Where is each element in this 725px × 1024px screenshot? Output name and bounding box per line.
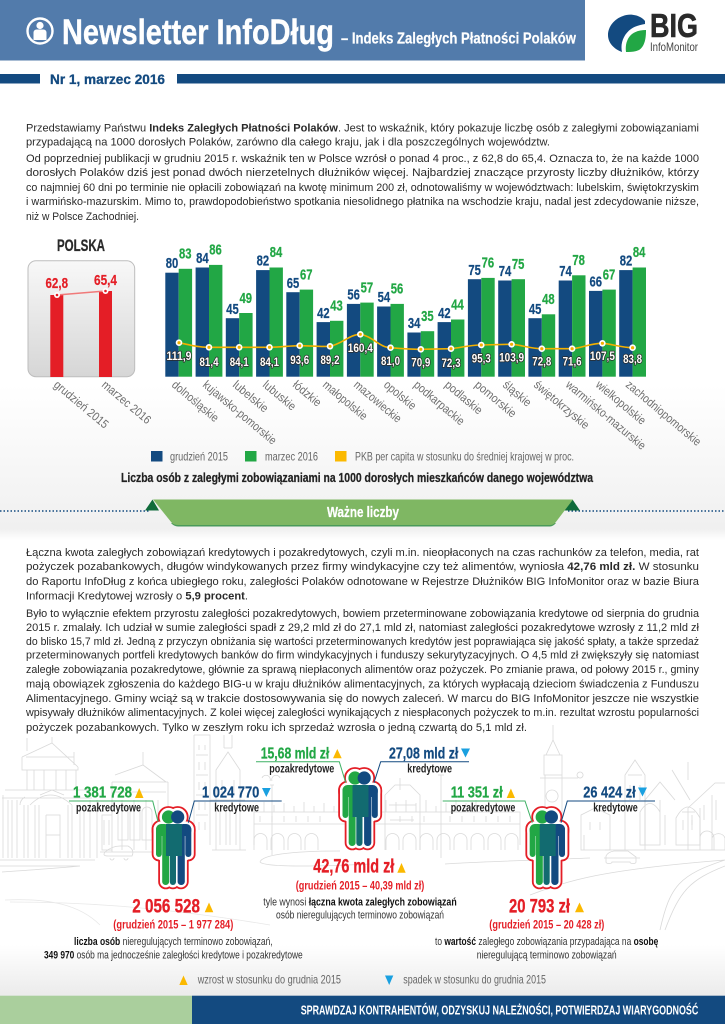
callout: persons 2 056 528: (grudzień 2015 – 1 977 284) — [113, 917, 233, 931]
callout: average 20 793 zł: 20 793 zł — [509, 895, 570, 917]
chart caption: Liczba osób z zaległymi zobowiązaniami na 1000 dorosłych mieszkańców danego województwa — [121, 470, 594, 485]
callout: total amount 42,76 mld zł: (grudzień 2015 – 40,39 mld zł) — [296, 880, 424, 892]
green bars — [179, 265, 646, 377]
values: 65,4 — [94, 272, 118, 289]
stat: average non-credit 11 351 zł: pozakredytowe — [451, 803, 515, 815]
intro text: niż w Polsce Zachodniej. — [26, 211, 139, 223]
main article text: mają obowiązek zgłoszenia do każdego BIG-u w kraju dłużników alimentacyjnych, za których wypłacają dzieciom świadczenia z Funduszu — [26, 678, 699, 690]
callout: persons 2 056 528 — [44, 895, 303, 962]
title: Newsletter InfoDług — [62, 13, 334, 52]
callout: average 20 793 zł — [435, 895, 658, 962]
trend line with markers — [54, 288, 108, 298]
logo: BIG InfoMonitor — [608, 7, 698, 54]
GDP value labels — [166, 343, 643, 370]
callout: total amount 42,76 mld zł: tyle wynosi łączna kwota zaległych zobowiązań — [263, 897, 457, 909]
navy value labels: 74 — [499, 263, 512, 280]
panel box — [28, 261, 135, 377]
green value labels: 76 — [482, 254, 494, 272]
GDP value labels: 93,6 — [290, 355, 309, 367]
axis labels: grudzień 2015 — [51, 378, 112, 432]
navy value labels: 56 — [347, 286, 360, 304]
GDP value labels: 95,3 — [472, 354, 491, 366]
green value labels: 84 — [270, 244, 283, 261]
main article text: do Raportu InfoDług z końca ubiegłego roku, zaległości Polaków odnotowane w Rejestrze Dłużników BIG InfoMonitor oraz w bazie Biura — [26, 576, 699, 588]
main article text: do blisko 15,7 mld zł. Jedną z przyczyn obniżania się wartości przeterminowanych kredytów jest poprawiająca się jakość spłaty, a także sprzedaż — [26, 636, 699, 648]
chart legend — [151, 450, 574, 464]
stat: persons credit 1 024 770: 1 024 770 — [202, 785, 259, 802]
voivodeship axis labels: lubelskie — [230, 378, 271, 415]
callout: total amount 42,76 mld zł: 42,76 mld zł — [313, 856, 395, 878]
icon: centre people group — [342, 771, 378, 846]
intro text: Przedstawiamy Państwu Indeks Zaległych Płatności Polaków . Jest to wskaźnik, który pokazuje liczbę osób z zaległymi zobowiązaniami — [26, 122, 699, 134]
intro text — [26, 122, 700, 223]
GDP value labels: 71,6 — [563, 356, 582, 368]
GDP value labels: 84,1 — [260, 357, 280, 369]
stat: amount credit 27,08 mld zł: 27,08 mld zł — [389, 745, 459, 762]
icon: left people group — [156, 810, 191, 885]
logo: BIG InfoMonitor: InfoMonitor — [650, 40, 698, 54]
voivodeship axis labels: warmińsko-mazurskie — [562, 377, 649, 453]
main article text: przeterminowanych portfeli kredytowych banków do firm windykacyjnych i funduszy sekurytyzacyjnych. O 4,5 mld zł zwiększyły się natomiast — [26, 650, 699, 662]
voivodeship axis labels — [169, 377, 704, 453]
voivodeship axis labels: opolskie — [381, 378, 419, 413]
chart legend: grudzień 2015 — [170, 450, 228, 464]
voivodeship axis labels: zachodniopomorskie — [623, 378, 704, 449]
stat: average non-credit 11 351 zł — [443, 785, 532, 823]
main article text: 2015 r. zmalały. Ich udział w sumie zaległości spadł z 29,2 mld zł do 27,1 mld zł, natomiast zaległości pozakredytowe wzrosły z 11,2 mld zł — [26, 622, 700, 634]
GDP value labels: 84,1 — [230, 357, 249, 369]
intro text: dorosłych Polaków dziś jest ponad dwóch nierzetelnych dłużników więcej. Najbardziej znaczące przyrosty liczby dłużników, którzy — [26, 167, 700, 179]
issue strip: Nr 1, marzec 2016 — [50, 71, 165, 87]
GDP value labels: 72,3 — [442, 358, 460, 370]
red bars — [50, 291, 112, 377]
navy value labels: 42 — [317, 305, 330, 322]
GDP value labels: 111,9 — [166, 351, 192, 363]
green value labels: 49 — [240, 290, 252, 307]
GDP value labels: 89,2 — [320, 355, 340, 367]
navy value labels: 84 — [196, 250, 209, 267]
callout: total amount 42,76 mld zł — [263, 856, 457, 921]
main article text: Alimentacyjnego. Gminy wciąż są w trakcie dostosowywania się do nowych zaleceń. W marcu do BIG InfoMonitor jeszcze nie wszystkie — [26, 693, 699, 705]
intro text: co najmniej 60 dni po terminie nie opłacili zobowiązań na kwotę minimum 200 zł, odnotowaliśmy w województwach: lubelskim, świętokrzyskim — [26, 182, 699, 194]
navy bars — [165, 268, 633, 377]
main article text: Było to wyłącznie efektem przyrostu zaległości pozakredytowych, bowiem przeterminowane zobowiązania kredytowe od sierpnia do grudnia — [26, 608, 699, 620]
GDP value labels: 70,9 — [411, 358, 430, 370]
stat: amount non-credit 15,68 mld zł: pozakredytowe — [269, 763, 334, 775]
axis labels: marzec 2016 — [99, 378, 154, 427]
green value labels: 84 — [633, 244, 646, 261]
axis labels — [51, 378, 154, 432]
icon: person in circle — [28, 18, 52, 44]
stat: amount non-credit 15,68 mld zł — [256, 745, 346, 783]
stat: amount credit 27,08 mld zł — [374, 745, 470, 783]
stat: persons non-credit 1 381 728 — [69, 785, 158, 822]
GDP value labels: 107,5 — [590, 351, 615, 363]
chart legend: PKB per capita w stosunku do średniej krajowej w proc. — [355, 450, 574, 464]
trend legend: spadek w stosunku do grudnia 2015 — [403, 972, 546, 986]
main article text: wpisywały dłużników alimentacyjnych. Z kolei więcej zaległości wynikających z niespłaconych pożyczek to m.in. rezultat wzrostu popularności — [25, 707, 699, 719]
stat: average credit 26 424 zł: 26 424 zł — [583, 785, 636, 802]
callout: total amount 42,76 mld zł: osób nieregulujących terminowo zobowiązań — [276, 909, 444, 921]
navy value labels: 65 — [287, 275, 299, 292]
GDP value labels: 81,0 — [381, 356, 400, 368]
stat: average non-credit 11 351 zł: 11 351 zł — [451, 785, 503, 802]
navy value labels: 74 — [559, 263, 572, 280]
green value labels: 67 — [300, 266, 312, 284]
voivodeship axis labels: wielkopolskie — [592, 377, 649, 428]
background fades — [0, 385, 725, 996]
voivodeship axis labels: lubuskie — [260, 378, 299, 414]
main article text: Informacji Kredytowej wzrosły o 5,9 procent. — [26, 590, 248, 602]
city sketch background — [0, 725, 725, 930]
voivodeship axis labels: śląskie — [500, 378, 535, 410]
main article text — [25, 547, 700, 734]
green value labels: 83 — [179, 246, 192, 262]
subtitle: – Indeks Zaległych Płatności Polaków — [341, 30, 577, 48]
stat: persons non-credit 1 381 728: 1 381 728 — [73, 785, 132, 802]
values — [46, 272, 118, 292]
navy value labels: 82 — [620, 252, 632, 270]
footer bar — [0, 996, 725, 1024]
GDP value labels: 83,8 — [623, 354, 643, 366]
voivodeship axis labels: podkarpackie — [411, 378, 468, 428]
green value labels: 35 — [421, 308, 434, 325]
stat: persons non-credit 1 381 728: pozakredytowe — [76, 803, 141, 815]
panel: Polska chart — [28, 237, 154, 432]
callout: average 20 793 zł: nieregulującą terminowo zobowiązań — [477, 950, 617, 962]
stat: amount credit 27,08 mld zł: kredytowe — [407, 763, 452, 775]
stat: persons credit 1 024 770 — [188, 785, 282, 823]
intro text: Od poprzedniej publikacji w grudniu 2015 r. wskaźnik ten w Polsce wzrósł o ponad 4 proc., z 62,8 do 65,4. Oznacza to, że na każde 1000 — [26, 153, 699, 165]
trend legend: wzrost w stosunku do grudnia 2015 — [197, 972, 341, 986]
navy value labels — [166, 250, 632, 332]
stat: average credit 26 424 zł — [561, 785, 655, 823]
bar chart: voivodeships — [165, 242, 704, 453]
chart legend: marzec 2016 — [265, 450, 318, 464]
green value labels: 56 — [391, 280, 403, 298]
header band — [0, 0, 585, 61]
green value labels: 44 — [451, 296, 464, 314]
green value labels: 43 — [330, 298, 343, 314]
navy value labels: 54 — [378, 289, 391, 306]
values: 62,8 — [46, 275, 68, 292]
navy value labels: 45 — [226, 301, 239, 318]
navy value labels: 80 — [166, 255, 178, 272]
callout: average 20 793 zł: to wartość zaległego zobowiązania przypadająca na osobę — [435, 936, 658, 948]
navy value labels: 82 — [257, 252, 269, 270]
GDP value labels: 160,4 — [348, 343, 373, 355]
GDP line with markers — [176, 331, 636, 353]
stat: persons credit 1 024 770: kredytowe — [214, 803, 259, 815]
GDP value labels: 72,8 — [532, 356, 552, 368]
logo: BIG InfoMonitor: BIG — [650, 7, 698, 44]
voivodeship axis labels: małopolskie — [320, 378, 371, 423]
callout: average 20 793 zł: (grudzień 2015 – 20 428 zł) — [489, 917, 604, 931]
heading: Polska: POLSKA — [57, 237, 105, 255]
GDP value labels: 103,9 — [499, 352, 524, 364]
green value labels: 86 — [209, 242, 222, 258]
voivodeship axis labels: łódzkie — [290, 378, 325, 410]
voivodeship axis labels: dolnośląskie — [169, 378, 222, 425]
trend legend — [179, 972, 546, 986]
main article text: pożyczek pozabankowych, długów windykowanych przez firmy windykacyjne czy też alimentów, wyniosła 42,76 mld zł. W stosunku — [26, 561, 699, 573]
icon: right people group — [530, 810, 565, 885]
voivodeship axis labels: kujawsko-pomorskie — [200, 378, 280, 448]
navy value labels: 66 — [590, 274, 602, 290]
voivodeship axis labels: świętokrzyskie — [531, 378, 592, 432]
callout: persons 2 056 528: 2 056 528 — [132, 895, 200, 917]
stat: average credit 26 424 zł: kredytowe — [593, 803, 638, 815]
section banner: Ważne liczby — [0, 500, 725, 526]
stat: amount non-credit 15,68 mld zł: 15,68 mld zł — [261, 745, 330, 762]
green value labels: 57 — [361, 280, 373, 296]
main article text: Łączna kwota zaległych zobowiązań kredytowych i pozakredytowych, czyli m.in. nieopłaconych na czas rachunków za telefon, media, rat — [26, 547, 699, 559]
callout: persons 2 056 528: liczba osób nieregulujących terminowo zobowiązań, — [74, 936, 273, 948]
voivodeship axis labels: mazowieckie — [351, 378, 405, 426]
green value labels: 67 — [603, 266, 615, 284]
navy value labels: 45 — [529, 301, 541, 318]
navy value labels: 34 — [408, 315, 421, 332]
green value labels: 48 — [542, 291, 555, 308]
main article text: pożyczek pozabankowych. Tylko w zeszłym roku ich sprzedaż wzrosła o jedną czwartą do 5,1 mld zł. — [26, 722, 527, 734]
issue strip — [0, 71, 725, 87]
GDP value labels: 81,4 — [200, 357, 219, 369]
navy value labels: 42 — [438, 305, 451, 322]
voivodeship axis labels: podlaskie — [442, 378, 486, 417]
voivodeship axis labels: pomorskie — [472, 378, 520, 421]
green value labels: 78 — [572, 252, 585, 269]
callout: persons 2 056 528: 349 970 osób ma jednocześnie zaległości kredytowe i pozakredytowe — [44, 950, 303, 962]
intro text: i warmińsko-mazurskim. Mimo to, prawdopodobieństwo spotkania niesolidnego płatnika na wschodzie kraju, nadal jest zdecydowanie niższe, — [26, 196, 699, 208]
navy value labels: 75 — [468, 262, 481, 279]
intro text: przypadającą na 1000 dorosłych Polaków, zarówno dla całego kraju, jak i dla poszczególnych województw. — [26, 136, 550, 148]
section banner: Ważne liczby: Ważne liczby — [327, 504, 399, 521]
main article text: zaległe zobowiązania pozakredytowe, głównie za sprawą niepłaconych alimentów oraz pożyczek. Po zmianie prawa, od połowy 2015 r., gminy — [26, 664, 700, 676]
green value labels — [179, 242, 646, 325]
green value labels: 75 — [512, 256, 524, 273]
